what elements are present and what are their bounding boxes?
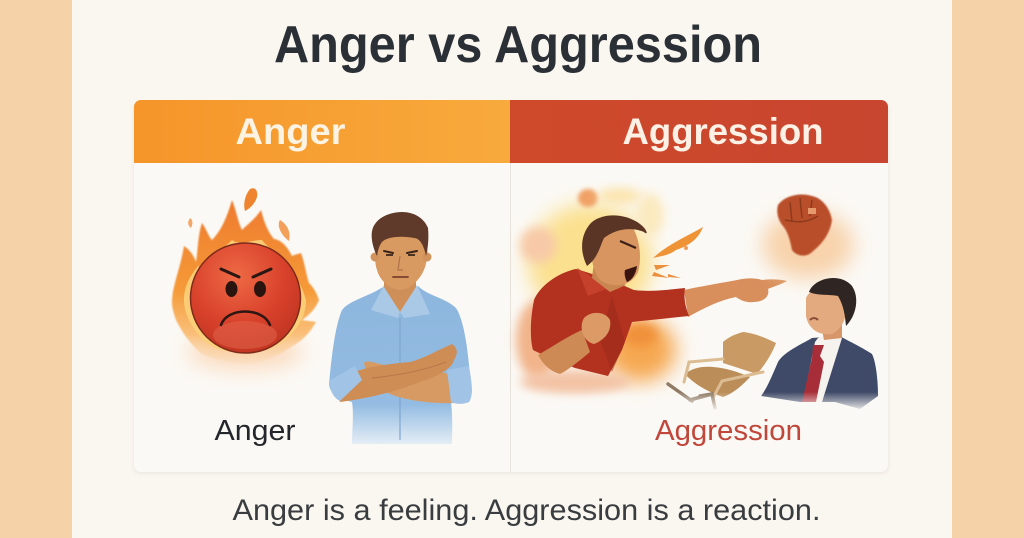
- face disc: [190, 243, 300, 353]
- shirt: [329, 286, 472, 444]
- eyes: [226, 281, 238, 297]
- title: Anger vs Aggression: [274, 16, 762, 74]
- head: [806, 288, 846, 334]
- pointing forearm: [684, 278, 787, 317]
- label: aggression: Aggression: [655, 415, 802, 447]
- flames: [172, 200, 319, 364]
- comparison card: [134, 100, 888, 473]
- illustration: man in suit: [761, 278, 878, 409]
- soft fade under illustrations: [516, 392, 884, 412]
- mouth: [625, 266, 637, 282]
- brows: [221, 269, 239, 277]
- brows and eyes: [384, 251, 417, 253]
- shirt: [531, 269, 689, 376]
- frown: [221, 312, 270, 325]
- illustration: background fire cloud: [516, 188, 676, 394]
- mouth: [810, 318, 818, 320]
- raised fist arm: [538, 330, 590, 374]
- rolled sleeves: [329, 366, 362, 401]
- panel header: aggression: Aggression: [622, 111, 824, 152]
- label: anger: Anger: [214, 415, 296, 447]
- illustration: man with crossed arms: [329, 212, 472, 444]
- neck: [820, 320, 842, 340]
- panel header: anger: Anger: [236, 111, 346, 152]
- hair: [809, 278, 856, 326]
- tie: [802, 345, 824, 402]
- hair: [582, 215, 647, 266]
- caption: Anger is a feeling. Aggression is a reaction.: [232, 494, 820, 527]
- panel header: aggression: [510, 100, 888, 163]
- hair: [372, 212, 428, 256]
- suit jacket: [761, 336, 878, 409]
- neck: [384, 270, 416, 312]
- shirt front: [803, 332, 842, 402]
- neck: [592, 262, 626, 292]
- illustration: shouting man pointing: [531, 215, 787, 376]
- collar: [577, 268, 622, 296]
- illustration: tipped chair: [668, 332, 776, 408]
- head: [375, 230, 428, 290]
- head: [591, 226, 640, 285]
- nose and mouth: [398, 256, 403, 270]
- crossed arms: [364, 361, 458, 403]
- panel header: anger: [134, 100, 510, 163]
- shout burst: [653, 227, 703, 258]
- illustration: raised fist: [762, 194, 854, 279]
- collar: [371, 285, 430, 318]
- icon: angry face in flames: [172, 188, 319, 370]
